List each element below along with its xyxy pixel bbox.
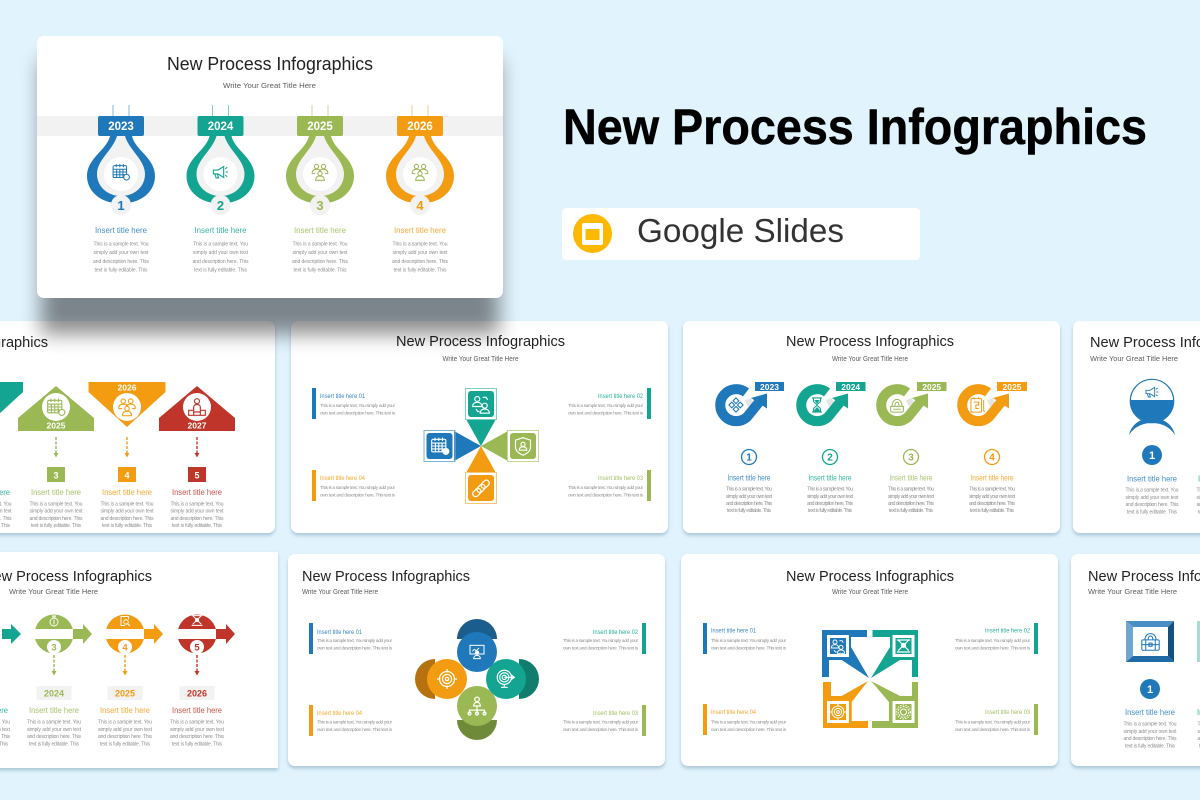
blue arm [424,430,481,462]
orange pentagon step [88,382,166,529]
circle cluster [415,619,539,740]
bevel frame step 1: This is a sample text. You [1124,722,1177,728]
callout 04: own text and description here. This text is [320,492,396,497]
Google Slides badge [562,208,920,260]
bulb step 2025: This is a sample text. You [292,242,348,248]
timeline band [37,116,503,136]
step 1: 1 [1149,450,1155,462]
slide subtitle: Write Your Great Title Here [832,356,908,363]
panel: slide with bevelled frames (cropped right) [1071,554,1200,766]
slide title: New Process Infographics [786,568,954,585]
callout 04 [703,704,787,735]
panel: hero slide with bulb timeline [37,36,503,298]
orange step: 2025 [115,688,135,698]
bulb step 2023: and description here. This [93,259,150,265]
slide title: New Process Infographics [302,568,470,585]
text column 2: text is fully editable. This [808,508,852,514]
red step: 5 [194,642,200,654]
red step: This is a sample text. You [170,720,224,726]
green step: 3 [51,642,57,654]
green pentagon step: simply add your own text [30,509,83,515]
red pentagon step: text is fully editable. This [172,523,222,529]
bulb step 2024: text is fully editable. This [194,268,248,274]
text column 3: and description here. This [888,501,934,507]
teal circle [486,659,526,699]
teal pentagon step [0,382,23,529]
bulb step 2023: 1 [117,198,125,213]
text column 3: 3 [908,452,914,464]
callout 04: This is a sample text. You simply add your [317,720,392,724]
arrow step 3: 2025 [922,382,941,392]
bulb step 2023: 2023 [108,121,134,133]
text column 2: Insert title here [808,474,852,482]
callout 02: This is a sample text. You simply add your [563,638,638,643]
hero subtitle: Write Your Great Title Here [223,83,316,90]
red pentagon step: 2027 [188,420,207,430]
bulb step 2025: and description here. This [292,259,348,265]
bulb step 2024: Insert title here [194,226,247,235]
callout 03 [563,705,646,736]
arrow step 3 [881,382,946,421]
teal partial step [0,624,21,747]
panel: slide with pentagon steps (cropped left) [0,321,275,533]
green step: Insert title here [29,706,80,715]
text column 4 [969,450,1016,514]
badge label: Google Slides [637,212,844,249]
orange pentagon step: and description here. This [100,516,154,522]
bulb step 2026: Insert title here [394,226,447,235]
bulb step 2026: and description here. This [392,259,448,265]
green pentagon step: 2025 [47,420,66,430]
orange pentagon step: simply add your own text [100,509,154,515]
callout 01: Insert title here 01 [711,628,756,634]
text column 4: 4 [989,452,995,464]
callout 02 [568,388,651,419]
text column 2: simply add your own text [807,494,854,500]
callout 04: own text and description here. This text is [711,727,787,732]
green pentagon step: This is a sample text. You [30,502,83,508]
slide title: New Process Infographics [396,333,565,350]
red pentagon step [159,386,235,529]
bevel frame step 1: and description here. This [1124,736,1177,742]
green arm [481,430,538,462]
callout 01 [312,388,396,419]
panel: slide with four overlapping circles [288,554,665,766]
arrow step 2: 2024 [841,382,860,392]
hero slide shadow [41,60,499,334]
slide subtitle: Write Your Great Title Here [302,589,378,596]
slide subtitle: Write Your Great Title Here [1090,356,1178,363]
bulb step 2025: simply add your own text [292,250,348,256]
callout 02: own text and description here. This text is [568,410,644,415]
green step: and description here. This [27,734,82,740]
bevel frame step 1: Insert title here [1125,708,1176,717]
red step [170,614,235,747]
callout 03: Insert title here 03 [598,475,643,482]
step 1 [1126,379,1179,515]
step 1: Insert title here [1127,474,1178,484]
bulb step 2024: This is a sample text. You [193,242,248,248]
hero title: New Process Infographics [167,53,373,74]
arrow step 1: 2023 [760,382,779,392]
callout 02: own text and description here. This text is [563,645,639,650]
callout 02: Insert title here 02 [593,629,638,636]
text column 4: This is a sample text. You [969,486,1015,492]
arrow step 1 [720,382,784,421]
callout 03: own text and description here. This text is [568,492,644,497]
bevel frame step 1: simply add your own text [1124,729,1177,735]
callout 03: own text and description here. This text is [563,727,639,732]
bulb step 2024: 2024 [208,121,234,133]
orange step: simply add your own text [98,727,153,733]
bulb step 2023: Insert title here [95,226,148,235]
orange pentagon step: 2026 [118,382,137,392]
callout 02 [563,623,646,654]
slide subtitle: Write Your Great Title Here [1088,589,1177,596]
red step: 2026 [187,688,207,698]
bulb step 2023: text is fully editable. This [94,268,148,274]
orange corner [823,681,868,728]
red pentagon step: and description here. This [170,516,224,522]
callout 01 [703,623,787,654]
arrow step 4: 2025 [1003,382,1022,392]
orange step: text is fully editable. This [100,741,150,747]
orange step: 4 [122,642,128,654]
text column 3: text is fully editable. This [889,508,934,514]
green pentagon step: text is fully editable. This [31,523,82,529]
green pentagon step [18,386,94,529]
callout 04: Insert title here 04 [711,709,756,716]
text column 1: and description here. This [726,501,772,507]
slide title: New Process Infographics [786,333,954,350]
bulb step 2024 [186,105,254,274]
bulb step 2023: simply add your own text [94,250,149,256]
text column 3: This is a sample text. You [888,486,934,492]
bulb step 2026: 4 [416,198,424,213]
bulb step 2026: This is a sample text. You [392,242,448,248]
callout 04 [309,705,393,736]
orange step [98,614,163,747]
callout 04: own text and description here. This text is [317,727,393,732]
callout 02: own text and description here. This text is [955,645,1031,650]
callout 03: This is a sample text. You simply add your [563,720,638,724]
text column 1: This is a sample text. You [726,486,772,492]
callout 03 [955,704,1038,735]
slide subtitle: Write Your Great Title Here [442,356,519,363]
text column 2: This is a sample text. You [807,486,853,492]
red step: simply add your own text [170,727,225,733]
callout 04: This is a sample text. You simply add your [711,720,786,724]
orange step: This is a sample text. You [98,720,152,726]
text column 3: Insert title here [890,474,933,482]
bevel frame step 1 [1124,621,1177,749]
text column 4: and description here. This [969,501,1016,507]
text column 2 [807,450,854,514]
callout 01: own text and description here. This text is [317,645,393,650]
callout 02: Insert title here 02 [598,393,643,400]
orange step: and description here. This [98,734,152,740]
orange pentagon step: 4 [124,470,130,480]
text column 1: simply add your own text [726,494,773,500]
panel: slide with circular arrows [683,321,1060,533]
callout 03: Insert title here 03 [593,710,638,717]
callout 03: Insert title here 03 [985,709,1030,716]
orange arm [466,446,496,504]
red pentagon step: This is a sample text. You [170,502,224,508]
callout 02 [955,623,1038,654]
bevel frame step 1: 1 [1147,684,1153,696]
callout 04: This is a sample text. You simply add your [320,485,395,490]
callout 02: This is a sample text. You simply add your [955,638,1030,643]
dark half discs [415,619,539,740]
bulb step 2023 [87,105,155,274]
callout 03 [568,470,651,501]
callout 01: This is a sample text. You simply add your [711,638,786,643]
text column 1: 1 [746,452,752,464]
cross diagram [424,388,538,504]
text column 2: and description here. This [807,501,854,507]
slide subtitle: Write Your Great Title Here [9,589,98,596]
callout 02: This is a sample text. You simply add your [568,403,643,408]
callout 01 [309,623,393,654]
callout 01: Insert title here 01 [317,629,362,636]
text column 4: text is fully editable. This [970,508,1014,514]
red pentagon step: Insert title here [172,488,223,497]
bulb step 2026: simply add your own text [392,250,448,256]
text column 3: simply add your own text [888,494,935,500]
green corner [871,681,918,728]
callout 01: Insert title here 01 [320,393,365,400]
teal arm [466,388,496,446]
callout 03: This is a sample text. You simply add your [955,720,1030,724]
blue circle [457,632,497,672]
green step: 2024 [44,688,64,698]
bulb step 2024: simply add your own text [193,250,249,256]
step 2 partial [1197,621,1200,749]
green step: This is a sample text. You [27,720,81,726]
text column 2: 2 [827,452,833,464]
step 1: simply add your own text [1126,495,1179,501]
pinwheel diagram [822,630,918,728]
orange pentagon step: text is fully editable. This [102,523,152,529]
callout 03: own text and description here. This text is [955,727,1031,732]
text column 1 [726,450,773,514]
red step: text is fully editable. This [172,741,222,747]
orange step: Insert title here [100,706,151,715]
bulb step 2025: Insert title here [294,226,347,235]
text column 3 [888,450,935,514]
bulb step 2026 [386,105,454,274]
green pentagon step: Insert title here [31,488,82,497]
bevel frame step 1: text is fully editable. This [1125,743,1176,749]
panel: slide with hourglass circle (cropped right) [1073,321,1200,533]
step 1: and description here. This [1126,502,1179,508]
green step [27,614,92,747]
step 2 text [1196,474,1200,515]
orange pentagon step: Insert title here [102,488,153,497]
teal corner [871,630,918,678]
red step: Insert title here [172,706,223,715]
blue corner [822,630,869,678]
red step: and description here. This [170,734,224,740]
panel: slide with square pinwheel [681,554,1058,766]
bulb step 2024: 2 [217,198,224,213]
text column 1: Insert title here [728,474,771,482]
callout 01: own text and description here. This text is [711,645,787,650]
icon: Google Slides logo [573,214,612,253]
green pentagon step: and description here. This [30,516,83,522]
green step: text is fully editable. This [29,741,80,747]
arrow step 2 [801,382,866,421]
red pentagon step: 5 [194,470,200,480]
bulb step 2026: text is fully editable. This [394,268,447,274]
panel: slide with four-arrow cross [291,321,668,533]
callout 02: Insert title here 02 [985,628,1030,634]
red pentagon step: simply add your own text [170,509,224,515]
bulb step 2025: 2025 [307,121,333,133]
bulb step 2023: This is a sample text. You [94,242,149,248]
text column 1: text is fully editable. This [727,508,772,514]
callout 04 [312,470,396,501]
green step: simply add your own text [27,727,82,733]
step 1: text is fully editable. This [1127,509,1178,515]
bulb step 2025: 3 [316,198,324,213]
bulb step 2026: 2026 [407,121,433,133]
arrow step 4 [962,382,1027,421]
bulb step 2025: text is fully editable. This [294,268,347,274]
main heading: New Process Infographics [563,99,1147,155]
callout 03: This is a sample text. You simply add your [568,485,643,490]
callout 04: Insert title here 04 [317,710,362,717]
callout 01: This is a sample text. You simply add your [320,403,395,408]
green circle [457,686,497,726]
bulb step 2024: and description here. This [192,259,249,265]
orange pentagon step: This is a sample text. You [100,502,154,508]
text column 4: Insert title here [970,474,1014,482]
text column 4: simply add your own text [969,494,1016,500]
step 1: This is a sample text. You [1126,488,1179,494]
panel: slide with circles and arrows (cropped left) [0,552,278,768]
bulb step 2025 [286,105,354,274]
slide subtitle: Write Your Great Title Here [832,589,908,596]
callout 01: own text and description here. This text is [320,410,396,415]
green pentagon step: 3 [53,470,59,480]
callout 04: Insert title here 04 [320,475,365,482]
callout 01: This is a sample text. You simply add your [317,638,392,643]
orange circle [427,659,467,699]
